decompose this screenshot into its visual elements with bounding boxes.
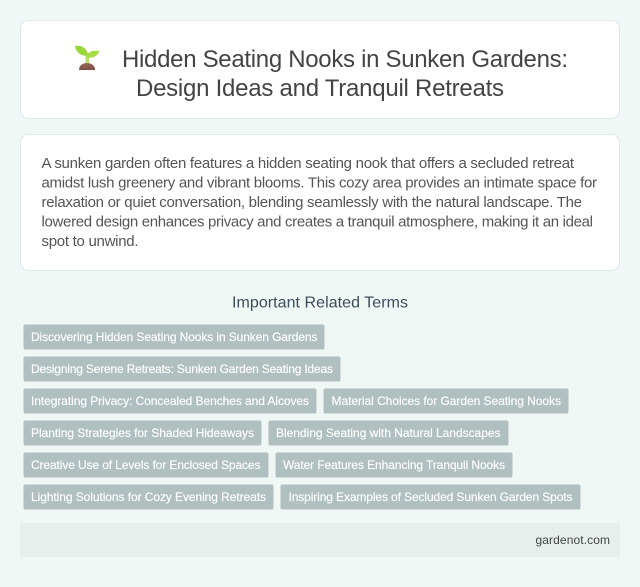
tag: Discovering Hidden Seating Nooks in Sunken Gardens (31, 330, 318, 344)
footer (20, 523, 620, 557)
panel: description card (20, 134, 620, 270)
icon: seedling (75, 46, 100, 70)
footer: gardenot.com (536, 533, 610, 547)
tag: Blending Seating with Natural Landscapes (276, 426, 500, 440)
tag: Lighting Solutions for Cozy Evening Retreats (31, 490, 266, 504)
tag (268, 420, 508, 446)
panel: title card (20, 20, 620, 118)
tag (24, 484, 274, 510)
tag: Creative Use of Levels for Enclosed Spaces (31, 458, 260, 472)
text block: description: spot to unwind. (42, 233, 138, 250)
tag (280, 484, 580, 510)
text block: description: amidst lush greenery and vibrant blooms. This cozy area provides an intimate space for (42, 174, 597, 192)
tag: Designing Serene Retreats: Sunken Garden Seating Ideas (31, 362, 333, 376)
tag (276, 452, 512, 478)
tag (24, 324, 324, 350)
tag (324, 388, 568, 414)
tag (24, 420, 262, 446)
tag: Water Features Enhancing Tranquil Nooks (283, 458, 505, 472)
tag: Material Choices for Garden Seating Nooks (332, 394, 561, 408)
tags: related terms (24, 324, 580, 510)
tag (24, 356, 340, 382)
text block: description: A sunken garden often features a hidden seating nook that offers a secluded retreat (42, 155, 575, 172)
tag (24, 452, 268, 478)
text block: description: lowered design enhances privacy and creates a tranquil atmosphere, making it an ideal (42, 214, 593, 230)
text block: description (42, 155, 597, 250)
tag: Integrating Privacy: Concealed Benches and Alcoves (31, 394, 309, 408)
title: Design Ideas and Tranquil Retreats (136, 75, 504, 102)
tag: Inspiring Examples of Secluded Sunken Garden Spots (288, 490, 572, 504)
text block: description: relaxation or quiet conversation, blending seamlessly with the natural landscape. The (42, 194, 582, 211)
tag: Planting Strategies for Shaded Hideaways (31, 426, 254, 440)
title: Hidden Seating Nooks in Sunken Gardens: (122, 46, 568, 73)
tag (24, 388, 316, 414)
title (122, 46, 568, 102)
heading: important related terms: Important Related Terms (232, 294, 408, 312)
